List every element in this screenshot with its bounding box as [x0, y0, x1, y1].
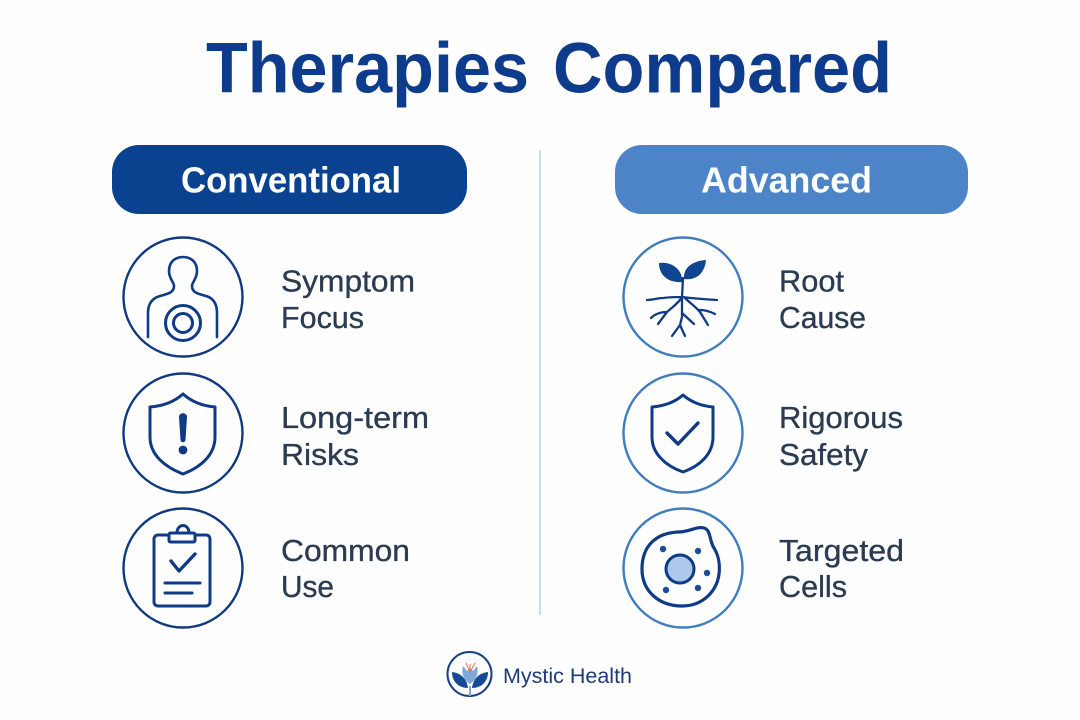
text: brand name: Mystic Health	[503, 665, 632, 688]
text: rigorous safety: Rigorous	[779, 400, 903, 435]
text: root cause	[779, 264, 866, 335]
text: root cause: Cause	[779, 300, 866, 335]
text: root cause: Root	[779, 264, 844, 298]
heading: Advanced: Advanced	[701, 160, 872, 200]
text: targeted cells: Cells	[779, 569, 847, 604]
text: rigorous safety	[779, 400, 903, 472]
icon: plant roots	[624, 238, 742, 356]
text: targeted cells: Targeted	[779, 533, 904, 568]
text: symptom focus: Focus	[281, 300, 364, 335]
icon: cell	[624, 508, 742, 628]
heading: Conventional	[112, 145, 467, 214]
icon: shield check	[624, 374, 742, 492]
text: common use	[281, 533, 410, 604]
text: rigorous safety: Safety	[779, 437, 868, 472]
title	[206, 30, 892, 108]
text: common use: Common	[281, 533, 410, 568]
text: targeted cells	[779, 533, 904, 604]
heading: Conventional: Conventional	[181, 160, 401, 200]
title: Compared	[553, 30, 892, 108]
text: long-term risks: Long-term	[281, 400, 429, 435]
heading: Advanced	[615, 145, 968, 214]
divider	[539, 150, 541, 615]
icon: logo lotus	[448, 652, 492, 696]
icon: clipboard	[124, 508, 242, 628]
text: symptom focus: Symptom	[281, 264, 415, 298]
panel: conventional	[112, 145, 467, 628]
icon: symptom focus	[124, 238, 242, 356]
text: long-term risks	[281, 400, 429, 472]
text: symptom focus	[281, 264, 415, 335]
panel: advanced	[615, 145, 968, 628]
text: long-term risks: Risks	[281, 437, 359, 472]
text: common use: Use	[281, 569, 334, 604]
icon: shield warning	[124, 374, 242, 492]
title: Therapies	[206, 30, 529, 108]
logo: Mystic Health	[448, 652, 632, 696]
